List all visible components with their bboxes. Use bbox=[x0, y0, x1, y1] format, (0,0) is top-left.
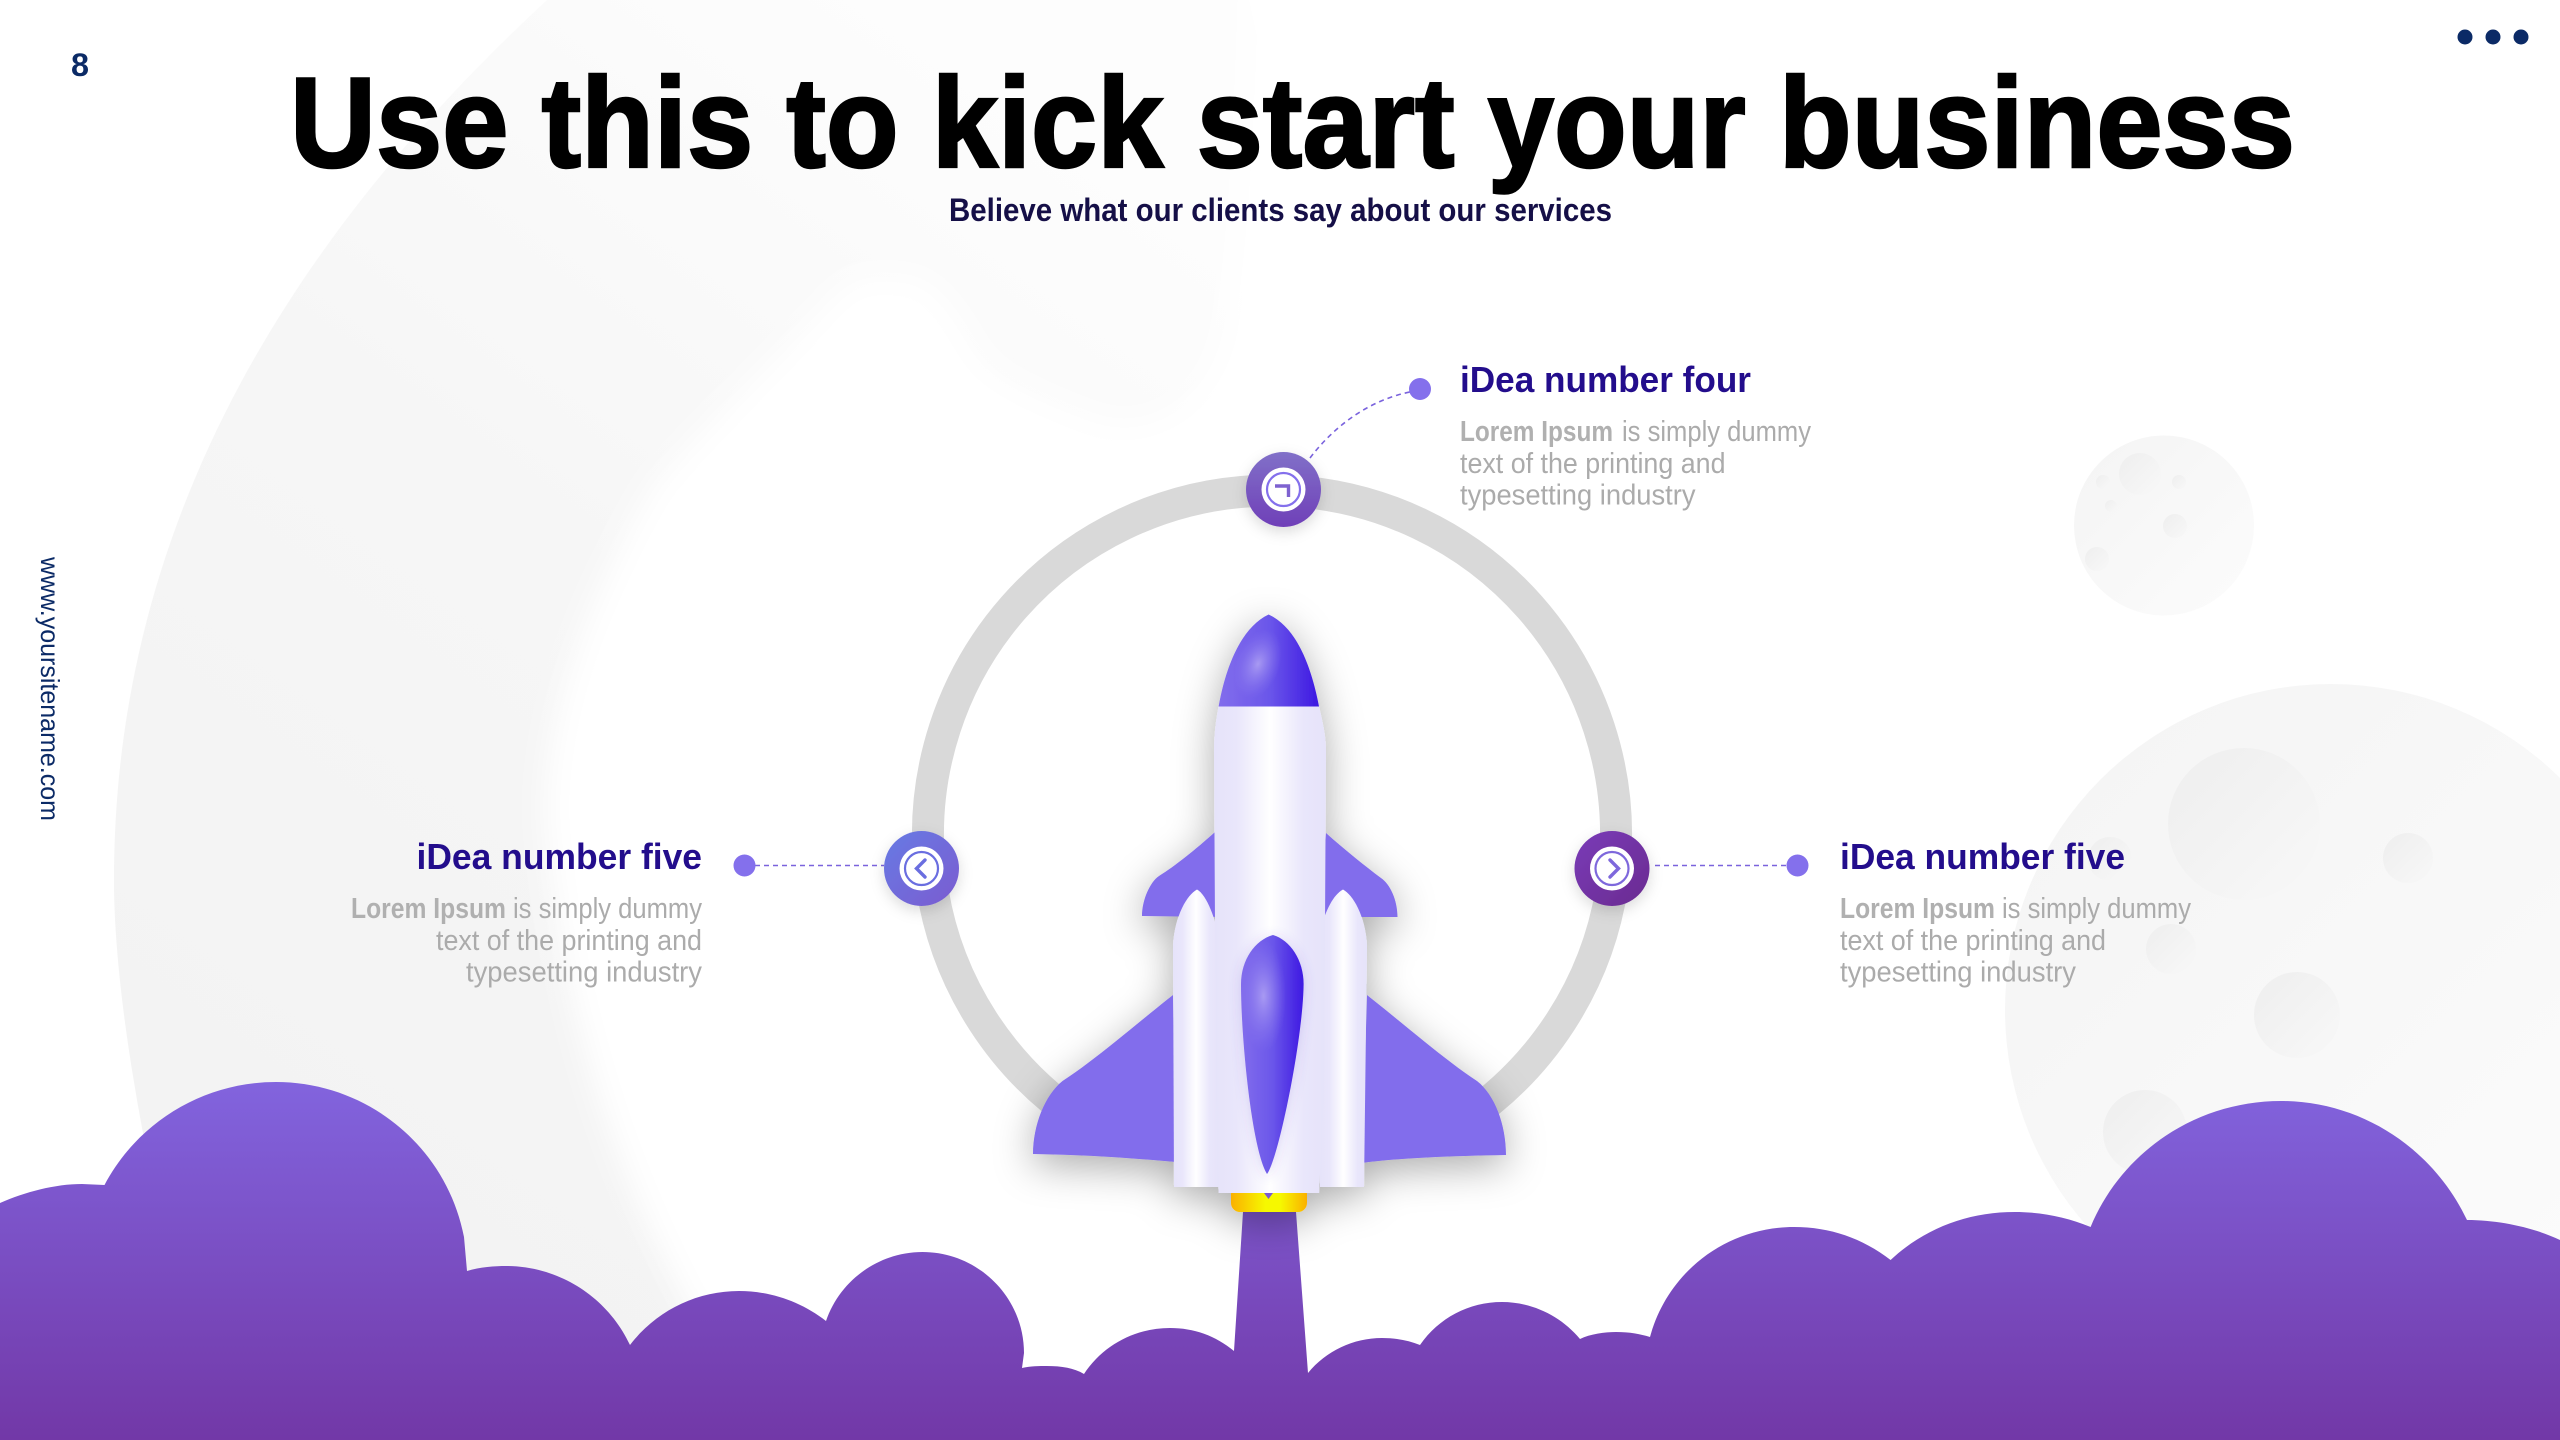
text block: idea five left: iDea number five bbox=[416, 836, 702, 877]
text block: idea five right: typesetting industry bbox=[1840, 956, 2076, 988]
centre fin bbox=[1241, 935, 1304, 1174]
text block: idea five left: typesetting industry bbox=[466, 956, 702, 988]
upper wings bbox=[1142, 832, 1398, 917]
nozzle bbox=[1231, 1185, 1307, 1212]
text block: idea five right: iDea number five bbox=[1840, 836, 2125, 877]
text block: idea four: text of the printing and bbox=[1460, 448, 1726, 480]
dot: right bbox=[1786, 854, 1808, 876]
text block: idea four: typesetting industry bbox=[1460, 480, 1696, 512]
text block: idea five left: is simply dummy bbox=[513, 893, 702, 925]
rocket structure with shadow bbox=[1033, 614, 1506, 1212]
text block: idea four: iDea number four bbox=[1460, 359, 1751, 400]
background: large faint moon swoosh bbox=[114, 0, 1700, 1440]
text block: idea four: Lorem Ipsum bbox=[1460, 416, 1613, 448]
text block: idea five right bbox=[1840, 836, 2191, 988]
text block: idea five left bbox=[351, 836, 702, 988]
icon: right chevron badge bbox=[1574, 831, 1650, 906]
lower wings bbox=[1033, 995, 1506, 1163]
rocket bbox=[1033, 614, 1506, 1212]
title: Use this to kick start your business bbox=[290, 52, 2295, 195]
text block: idea five right: text of the printing and bbox=[1840, 925, 2106, 957]
text block: idea four: is simply dummy bbox=[1622, 416, 1811, 448]
menu dots bbox=[2458, 30, 2528, 44]
orbit ring bbox=[928, 491, 1616, 1120]
icon: top chevron badge bbox=[1246, 452, 1321, 527]
page number: 8 bbox=[71, 47, 89, 83]
connector: left icon to dot bbox=[755, 864, 884, 866]
small moon bbox=[2074, 436, 2254, 616]
side boosters bbox=[1173, 890, 1367, 1187]
text block: idea four bbox=[1460, 359, 1811, 512]
nose cone bbox=[1219, 614, 1319, 706]
website vertical label: www.yoursitename.com bbox=[35, 556, 65, 821]
dot: left bbox=[734, 854, 756, 876]
main body bbox=[1214, 706, 1326, 1193]
connector: right icon to dot bbox=[1655, 864, 1790, 866]
subtitle: Believe what our clients say about our services bbox=[949, 192, 1612, 228]
large moon bbox=[2005, 684, 2560, 1336]
purple clouds and exhaust flame bbox=[0, 1082, 2560, 1440]
connector: top icon to dot bbox=[1310, 392, 1410, 458]
text block: idea five right: is simply dummy bbox=[2002, 893, 2191, 925]
icon: left chevron badge bbox=[884, 831, 959, 906]
text block: idea five left: Lorem Ipsum bbox=[351, 893, 506, 925]
text block: idea five right: Lorem Ipsum bbox=[1840, 893, 1995, 925]
dot: top bbox=[1409, 378, 1431, 400]
text block: idea five left: text of the printing and bbox=[436, 925, 702, 957]
